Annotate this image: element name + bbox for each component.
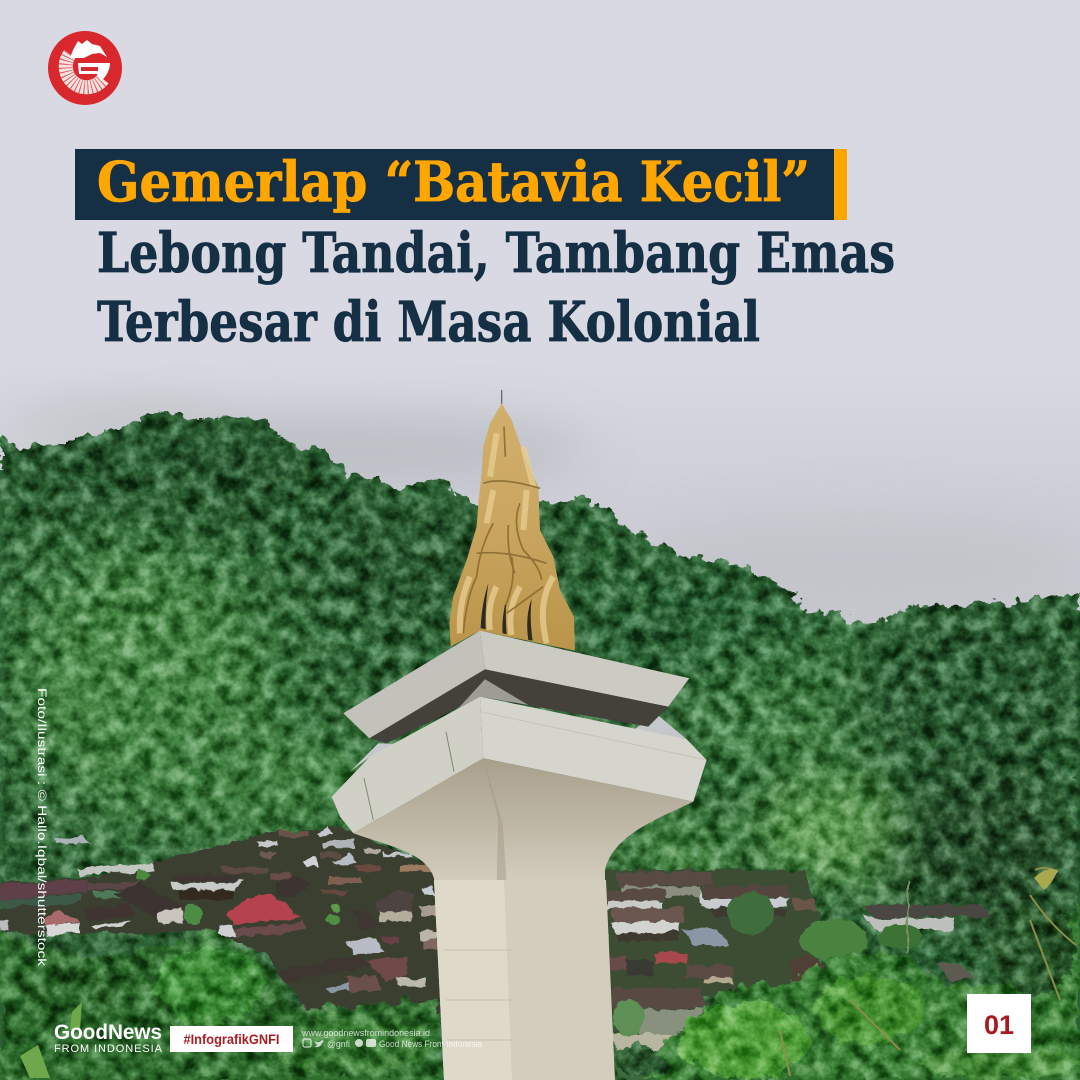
title block — [75, 149, 895, 354]
footer: website and social handles — [301, 1028, 482, 1049]
footer: brand wordmark: GoodNews — [54, 1021, 162, 1044]
page number badge — [967, 994, 1031, 1053]
village left of the monument — [0, 827, 443, 1027]
title line 2: Lebong Tandai, Tambang Emas — [97, 220, 895, 285]
footer: website and social handles: www.goodnewsfromindonesia.id — [301, 1028, 430, 1038]
steel mesh — [350, 714, 687, 772]
upper slab — [343, 631, 689, 738]
footer: brand wordmark: FROM INDONESIA — [54, 1043, 163, 1055]
golden flame — [449, 403, 575, 651]
footer: hashtag badge — [170, 1026, 293, 1052]
solid underlay that hides displaced edges of the forest — [0, 470, 1080, 1080]
page number badge: 01 — [984, 1010, 1014, 1040]
footer: hashtag badge: #InfografikGNFI — [184, 1032, 280, 1047]
title line 3: Terbesar di Masa Kolonial — [97, 289, 760, 354]
title highlight bar — [75, 149, 834, 220]
footer: brand wordmark — [54, 1021, 163, 1055]
lower slab — [332, 697, 707, 833]
title accent bar — [834, 149, 847, 220]
foreground foliage — [0, 868, 1080, 1080]
monument column — [434, 880, 615, 1080]
dark recess between slabs — [369, 669, 668, 743]
monument — [332, 390, 707, 883]
logo: GNFI eagle emblem — [48, 31, 122, 105]
footer: website and social handles: @gnfi — [327, 1039, 350, 1049]
slab underside and column flare — [353, 758, 693, 883]
forested mountain — [0, 400, 1080, 1080]
photo credit: Foto/Ilustrasi : © Hallo.Iqbal/shutterstock — [35, 688, 49, 967]
monument spire pin — [501, 390, 502, 404]
title line 1: Gemerlap “Batavia Kecil” — [97, 149, 810, 214]
village right of the monument — [603, 870, 992, 1080]
footer: website and social handles: Good News From Indonesia — [379, 1039, 482, 1049]
